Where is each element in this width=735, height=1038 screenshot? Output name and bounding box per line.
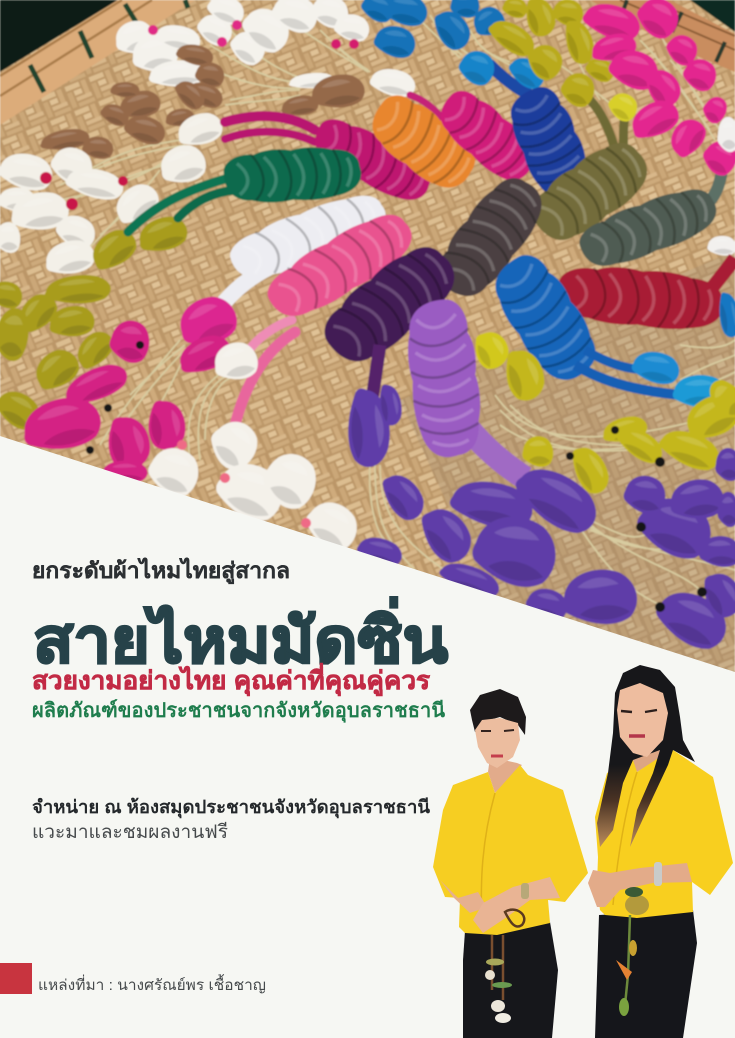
blue cords and petals right	[575, 290, 735, 408]
magenta silk petals top right	[579, 0, 735, 180]
wristwatch	[521, 883, 529, 899]
silk knot: pink-magenta	[440, 90, 530, 180]
silk knot: dark red	[558, 266, 722, 330]
white cord tail	[217, 274, 273, 307]
red source marker	[0, 963, 32, 994]
white silk petals top	[111, 0, 418, 100]
woman on the right in yellow blouse	[588, 665, 733, 1038]
silk knot: grey-green	[578, 188, 717, 267]
magenta cord loops	[128, 95, 442, 232]
silk knot: white	[229, 194, 387, 276]
neck	[632, 745, 660, 772]
silk knot: green	[223, 145, 362, 205]
shaded far side of basket	[400, 250, 735, 680]
panel: photo of silk cords on a woven basket	[0, 0, 735, 680]
white silk petals left	[0, 107, 226, 280]
white petals right edge	[707, 117, 735, 256]
black beads	[86, 341, 707, 612]
white silk petals bottom	[147, 342, 358, 548]
text: free visit invitation: แวะมาและชมผลงานฟรี	[32, 821, 228, 843]
arms and hands	[440, 880, 487, 913]
face	[475, 718, 520, 768]
blouse	[595, 750, 733, 918]
silk knot: olive	[535, 142, 648, 241]
heading: kicker: ยกระดับผ้าไหมไทยสู่สากล	[32, 557, 290, 585]
pink tubes	[235, 320, 295, 425]
lavender cord tail	[462, 420, 525, 478]
skirt	[463, 922, 558, 1038]
neck	[488, 757, 522, 793]
woman on the left in yellow blouse	[433, 689, 588, 1038]
yellow-olive silk petals top	[484, 0, 642, 125]
basket rim	[0, 0, 735, 125]
text: sales location: จำหน่าย ณ ห้องสมุดประชาชนจังหวัดอุบลราชธานี	[32, 797, 431, 819]
silk knot: dark brown	[442, 177, 542, 297]
blue silk petals top	[358, 0, 550, 93]
text: source credit: แหล่งที่มา : นางศรัณย์พร เชื้อชาญ	[38, 974, 266, 994]
silk knot: dark purple	[324, 246, 454, 362]
subtitle: red tagline: สวยงามอย่างไทย คุณค่าที่คุณคู่ควร	[32, 663, 431, 697]
tan cords	[40, 15, 735, 605]
hair	[470, 689, 526, 735]
dark blue cord and gold cords	[490, 65, 722, 210]
red and pink beads	[40, 20, 359, 528]
purple silk petals	[344, 382, 735, 657]
silk flower tassel	[616, 887, 649, 1016]
silk tassel	[485, 910, 524, 1023]
arms and hands	[588, 863, 692, 907]
facial features	[621, 710, 657, 736]
title: สายไหมมัดซิ่น	[33, 597, 448, 676]
brown silk petals	[38, 42, 367, 160]
silk knot: magenta	[314, 118, 431, 201]
long hair	[597, 665, 695, 847]
silk knot: blue	[494, 254, 596, 381]
blouse	[433, 765, 588, 935]
skirt	[595, 910, 697, 1038]
bracelet	[654, 862, 662, 886]
dark table corners	[0, 0, 735, 72]
silk knot: pink	[266, 214, 412, 316]
silk knot: orange	[372, 94, 476, 188]
silk knot: navy	[510, 86, 586, 192]
yellow silk petals right	[468, 325, 735, 499]
silk knot: lavender	[407, 298, 481, 458]
magenta silk petals left	[17, 288, 244, 483]
woven basket	[0, 0, 735, 680]
olive silk petals left	[0, 211, 192, 435]
subtitle: green product line: ผลิตภัณฑ์ของประชาชนจากจังหวัดอุบลราชธานี	[32, 699, 445, 723]
facial features	[481, 730, 514, 756]
face	[617, 683, 668, 757]
